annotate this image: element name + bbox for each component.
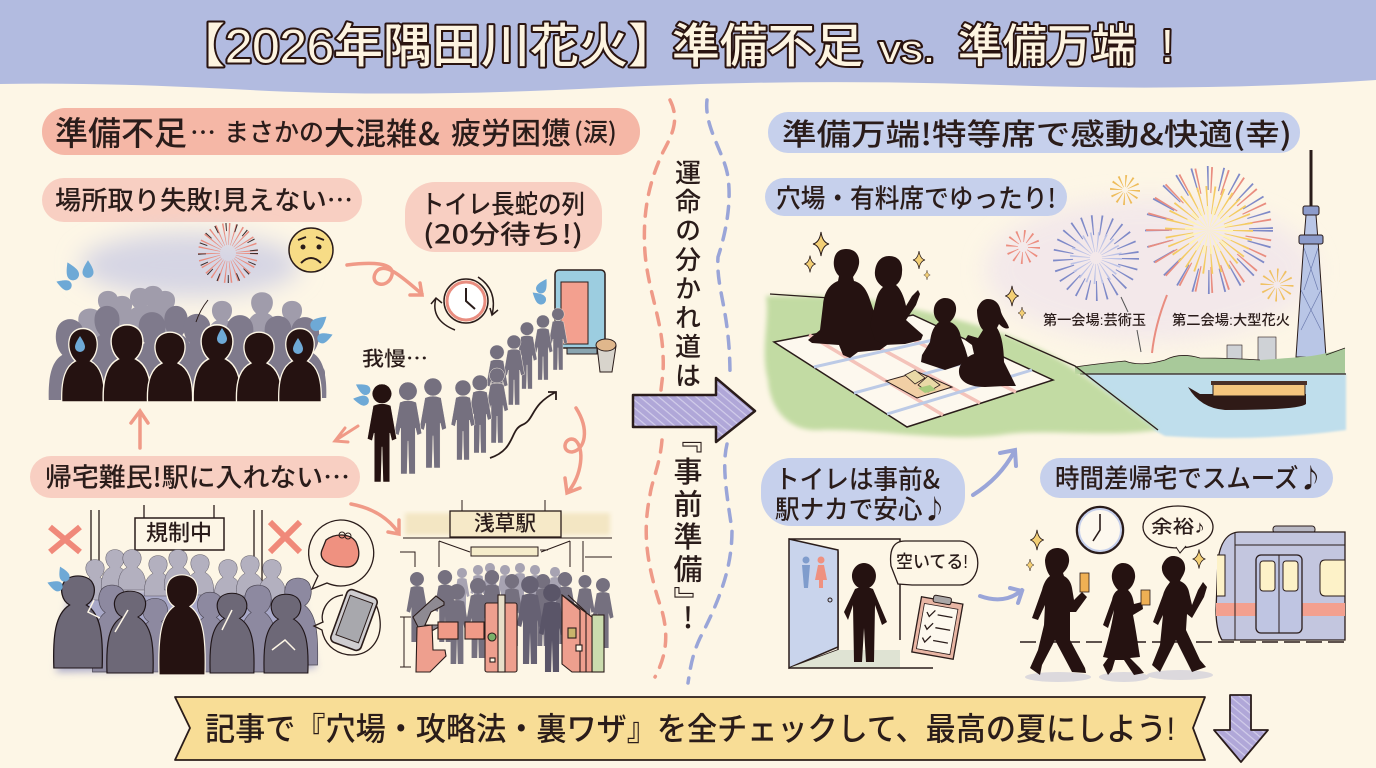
heading: 準備不足: &: [418, 108, 440, 154]
illustration: 花火 黄 上: [1116, 181, 1134, 199]
illustration: 食べ物のトレイ: [886, 370, 952, 398]
illustration: ホームの線: [1020, 641, 1345, 643]
icon: 時計: [431, 277, 498, 330]
arrow: 下向き: [1214, 695, 1268, 762]
sign: 浅草駅: [450, 511, 561, 537]
heading: 準備不足: まさかの: [224, 113, 324, 149]
title: [176, 20, 1174, 72]
text: 我慢: 我慢…: [362, 342, 428, 372]
speech bubble: 余裕: 余裕♪: [1151, 517, 1205, 537]
banner: 記事で『穴場・攻略法・裏ワザ』を全チェックして、最高の夏にしよう!: [205, 711, 1175, 747]
icon: チェックリスト: [912, 593, 964, 659]
arrow: 上向き青: [973, 450, 1016, 495]
title: !: [1161, 20, 1174, 72]
panel: 準備万端: [761, 110, 1346, 682]
divider: 運命の分かれ道: [633, 100, 755, 683]
illustration: トイレの入口: [789, 539, 933, 668]
icon: スマホの吹き出し: [314, 588, 380, 655]
sign: 浅草駅: 浅草駅: [474, 512, 536, 536]
arrow: 帰宅難民から駅へ: [351, 504, 399, 534]
heading: 準備不足: [42, 107, 640, 155]
label: 時間差帰宅: 時間差帰宅でスムーズ♪: [1055, 458, 1323, 496]
sign: 規制中: 規制中: [146, 520, 212, 546]
label: トイレは事前: 駅ナカで安心♪: [775, 490, 947, 526]
arrow: 行列から帰宅難民へ: [335, 426, 358, 442]
heading: 準備不足: 準備不足: [55, 107, 187, 155]
label: トイレは事前: トイレは事前&: [775, 460, 940, 496]
labels: 会場: 第二会場:大型花火: [1172, 312, 1290, 328]
title: 準備万端: [958, 20, 1136, 72]
labels: 会場: [1043, 312, 1290, 328]
illustration: 花火 黄 右: [1267, 275, 1287, 295]
heading: 準備不足: 疲労困憊: [451, 109, 571, 153]
illustration: 川の線: [1080, 373, 1346, 375]
title: vs.: [879, 29, 935, 71]
illustration: 歩く3人: [1025, 548, 1213, 682]
label: トイレ長蛇の列: (20分待ち!): [423, 214, 583, 252]
illustration: 打ち上げの軌跡: [1121, 295, 1167, 353]
illustration: 川: [1082, 374, 1346, 438]
label: トイレ長蛇の列: トイレ長蛇の列: [421, 184, 585, 222]
illustration: 花火 中: [1063, 225, 1129, 291]
illustration: 屋形船: [1188, 381, 1307, 410]
arrow: 帰宅難民から群衆へ: [131, 411, 148, 448]
illustration: 規制中の群衆: [46, 505, 318, 675]
illustration: スカイツリー: [1296, 150, 1326, 357]
arrow: 大矢印: [633, 378, 755, 442]
speech bubble: 余裕: [1143, 506, 1213, 553]
illustration: レジャーシート: [774, 315, 1053, 427]
label: 場所取り失敗: 場所取り失敗!見えない…: [55, 180, 353, 218]
heading: 準備万端: 準備万端!特等席で感動&快適(幸): [782, 110, 1292, 154]
title: 【2026年隅田川花火】: [176, 20, 677, 72]
label: 帰宅難民: 帰宅難民!駅に入れない…: [45, 458, 350, 494]
speech bubble: 空いてる: [891, 541, 978, 585]
illustration: 草地: [765, 296, 1158, 437]
labels: 会場: 第一会場:芸術玉: [1043, 312, 1146, 328]
illustration: 見えない群衆: [49, 233, 334, 402]
icons: 帰宅のきらめき: [1026, 530, 1205, 571]
text: 事前準備: !: [683, 595, 693, 637]
heading: 準備不足: 大混雑: [324, 108, 417, 154]
title band: [0, 0, 1376, 94]
arrow: 右向き青: [980, 588, 1022, 603]
icon: 小さな花火: [202, 227, 254, 279]
heading: 準備不足: (涙): [574, 113, 617, 149]
icons: 家族のきらめき: [804, 232, 1026, 319]
label: 穴場・有料席: 穴場・有料席でゆったり!: [776, 178, 1056, 216]
sign: 規制中: [135, 518, 224, 550]
illustration: 電車: [1216, 526, 1345, 640]
illustration: トイレの行列: [352, 276, 567, 482]
text: 運命の分かれ道は: 運命の分かれ道は: [670, 159, 706, 391]
illustration: 家族のシルエット: [808, 249, 1016, 387]
illustration: 対岸の街並み: [1075, 337, 1345, 374]
text: 事前準備: 『事前準備』: [667, 424, 709, 619]
arrow: 群衆からトイレへ: [347, 263, 422, 295]
illustration: 土手の線: [770, 294, 1158, 430]
icon: 困り顔: [289, 228, 333, 272]
sky wash: [985, 198, 1315, 342]
icon: 仮設トイレ: [555, 270, 616, 372]
label: トイレ長蛇の列: [405, 182, 602, 252]
panel: 準備不足: [30, 107, 640, 675]
label: トイレは事前: [761, 458, 965, 526]
illustration: 浅草駅の改札: [400, 500, 614, 672]
title: 準備不足: [672, 20, 863, 72]
icon: 掛け時計: [1077, 507, 1123, 553]
heading: 準備不足: …: [190, 112, 216, 150]
arrow: 行列から駅へ: [565, 408, 584, 493]
speech bubble: 空いてる: 空いてる!: [896, 552, 968, 572]
icon: 財布の吹き出し: [309, 520, 374, 589]
illustration: 花火 赤: [1012, 236, 1034, 258]
illustration: 花火 大: [1157, 178, 1261, 282]
banner: [175, 697, 1205, 760]
